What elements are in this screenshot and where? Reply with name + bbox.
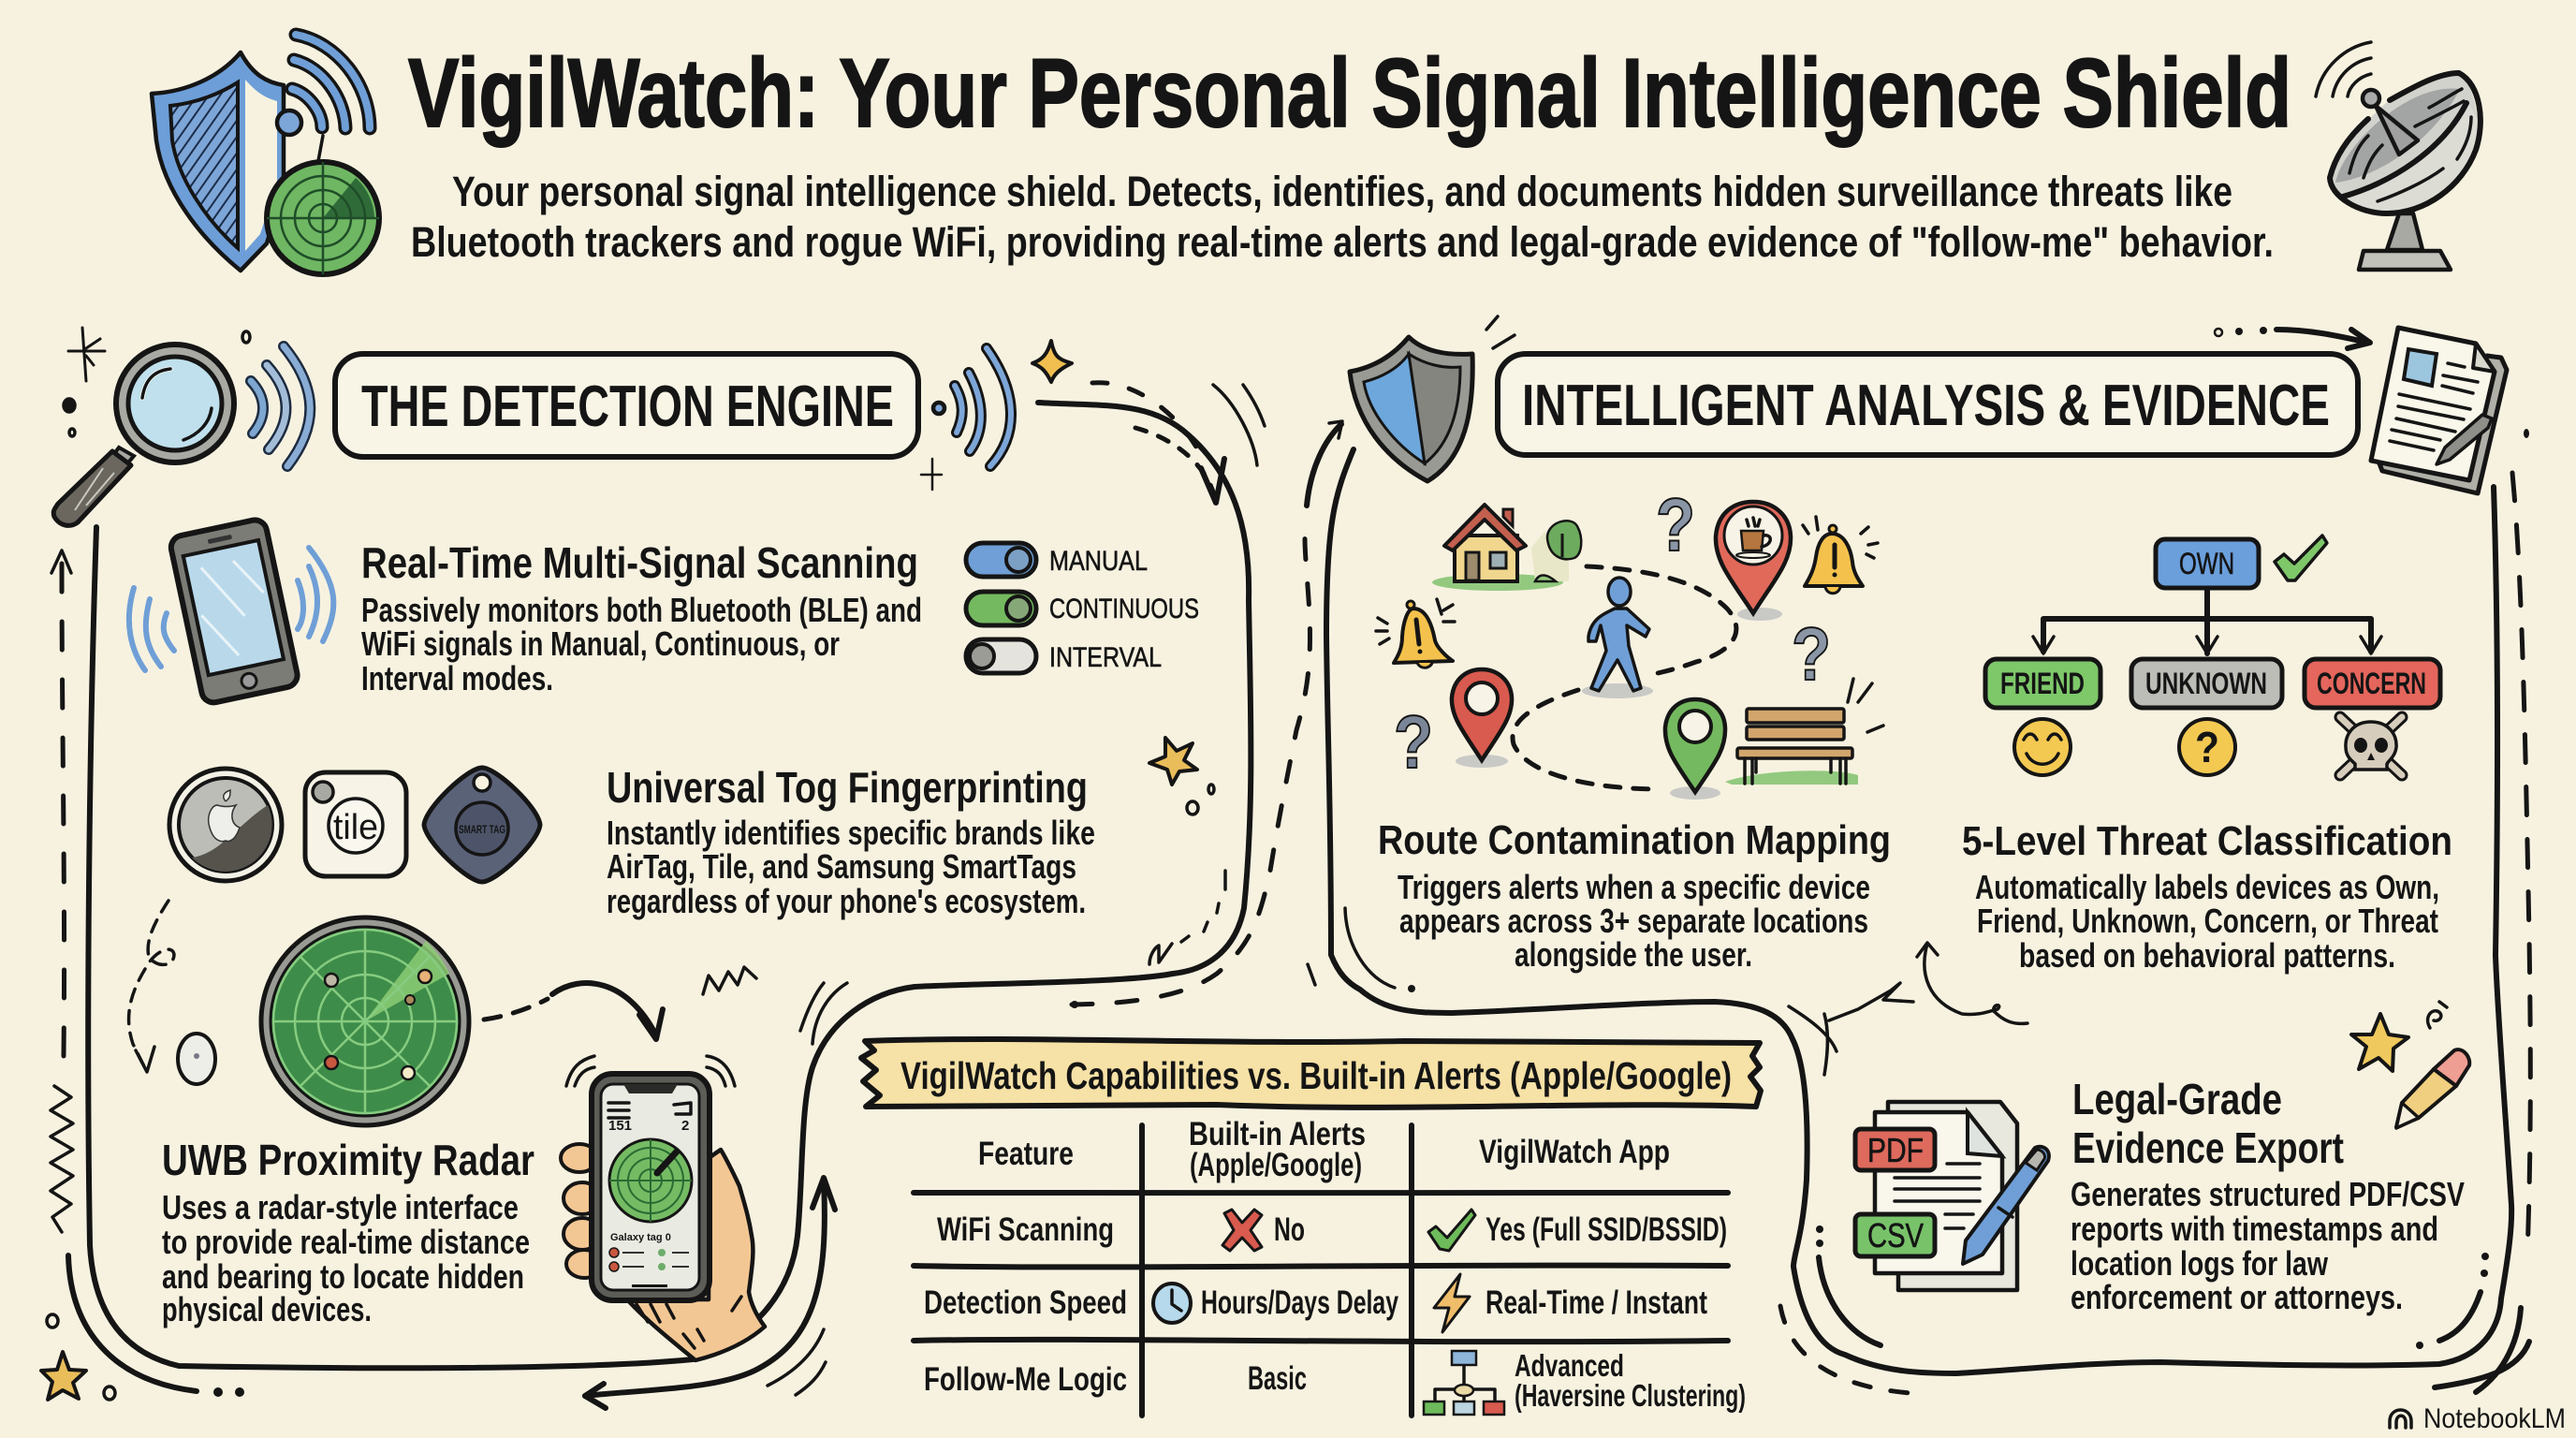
icon: check mark	[2275, 536, 2327, 580]
row: wifi scanning	[937, 1210, 1727, 1251]
table grid	[914, 1125, 1728, 1416]
route dashed path	[1513, 566, 1736, 789]
legend: scan mode toggles: CONTINUOUS	[1049, 594, 1199, 624]
decorative ticks	[1848, 679, 1883, 732]
badge: own: OWN	[2179, 547, 2234, 580]
icon: hand holding phone with radar: 151	[608, 1118, 632, 1134]
feature: real-time multi-signal scanning	[129, 518, 922, 705]
heading	[2072, 1075, 2344, 1172]
body text	[2071, 1175, 2465, 1316]
body text	[361, 591, 922, 697]
icon: pencil	[2396, 1049, 2469, 1128]
badge: concern	[2305, 659, 2440, 708]
section heading: intelligent analysis & evidence	[1498, 354, 2358, 455]
icon: hand holding phone with radar	[561, 1056, 765, 1360]
body text: location logs for law	[2071, 1244, 2329, 1283]
icon: question marks: ?	[1394, 700, 1433, 784]
body text	[1398, 868, 1870, 974]
icon: gold star bottom left	[41, 1352, 86, 1400]
feature: legal-grade evidence export	[1855, 1002, 2469, 1316]
body text	[162, 1188, 530, 1328]
icon: documents with pdf and csv tags and pen	[1855, 1102, 2049, 1290]
arrow: dotted arrow to document	[2215, 327, 2370, 348]
icon: tile tag	[305, 772, 406, 876]
panel: analysis and evidence frame	[1326, 449, 2511, 1373]
icon: question marks: ?	[1792, 612, 1831, 696]
icon: coffee location pin	[1716, 502, 1791, 621]
heading: Evidence Export	[2072, 1123, 2344, 1172]
icon: smile face	[2014, 719, 2071, 775]
row: wifi scanning: WiFi Scanning	[937, 1211, 1114, 1248]
body text: enforcement or attorneys.	[2071, 1278, 2403, 1316]
table column headers	[978, 1116, 1670, 1183]
body text: to provide real-time distance	[162, 1223, 530, 1261]
body text: reports with timestamps and	[2071, 1210, 2438, 1248]
body text: alongside the user.	[1515, 935, 1752, 974]
decorative dashes outside right frame	[2416, 429, 2530, 1392]
section heading: intelligent analysis & evidence: INTELLIGENT ANALYSIS & EVIDENCE	[1522, 374, 2330, 438]
icon: signal waves right of heading	[933, 348, 1011, 466]
table: capabilities comparison	[861, 1039, 1761, 1416]
icon: samsung tag: SMART TAG	[459, 823, 505, 836]
icon: airtag	[169, 769, 282, 881]
icon: magnifying glass	[53, 345, 310, 525]
icon: question marks	[1394, 483, 1831, 784]
row: follow-me logic	[924, 1348, 1746, 1415]
decorative squiggle and dots bottom left	[47, 1086, 244, 1400]
feature: universal tag fingerprinting	[169, 763, 1095, 920]
arrow: double ended outer arrow	[585, 983, 847, 1408]
arrow: curl dashed arrow to tracker	[129, 901, 215, 1084]
body text: appears across 3+ separate locations	[1399, 902, 1868, 940]
row: wifi scanning: No	[1274, 1211, 1305, 1248]
icon: tile tag: tile	[333, 808, 378, 847]
row: detection speed	[924, 1274, 1707, 1332]
heading: 5-Level Threat Classification	[1962, 818, 2452, 864]
icon: documents with pdf and csv tags and pen: PDF	[1867, 1131, 1924, 1169]
icon: question face: ?	[2195, 723, 2219, 771]
section heading: the detection engine	[335, 354, 918, 457]
illustration: house and tree	[1432, 505, 1581, 591]
legend: scan mode toggles	[966, 543, 1199, 673]
icon: skull and crossbones	[2340, 717, 2402, 775]
row: follow-me logic: Basic	[1248, 1360, 1307, 1397]
icon: gold sparkle	[1032, 341, 1072, 382]
subtitle text: Your personal signal intelligence shield. Detects, identifies, and documents hidden surveillance threats like	[452, 168, 2232, 215]
icon: hand holding phone with radar: 2	[681, 1118, 689, 1134]
heading: Route Contamination Mapping	[1378, 817, 1891, 863]
body text	[607, 814, 1095, 920]
arrow: frame upper-left arrow	[1307, 421, 1342, 506]
row: detection speed: Hours/Days Delay	[1201, 1284, 1398, 1321]
row: follow-me logic: (Haversine Clustering)	[1515, 1378, 1746, 1413]
table heading banner	[861, 1039, 1761, 1108]
decorative dashes along frame corner	[1072, 538, 1310, 1005]
badge: unknown: UNKNOWN	[2145, 667, 2267, 700]
diagram: classification tree	[1985, 536, 2440, 775]
heading: UWB Proximity Radar	[162, 1136, 534, 1184]
body text: physical devices.	[162, 1290, 372, 1328]
heading: Legal-Grade	[2072, 1075, 2282, 1123]
body text: Instantly identifies specific brands like	[607, 814, 1095, 852]
body text: Uses a radar-style interface	[162, 1188, 519, 1226]
icon: satellite dish	[2316, 42, 2481, 270]
row: detection speed: Detection Speed	[924, 1284, 1127, 1321]
subtitle text: Bluetooth trackers and rogue WiFi, providing real-time alerts and legal-grade evidence of "follow-me" behavior.	[411, 218, 2274, 266]
icon: smartphone with waves	[129, 518, 333, 705]
icon: gold star near frame	[1149, 738, 1214, 814]
section heading: the detection engine: THE DETECTION ENGINE	[361, 374, 894, 439]
body text: WiFi signals in Manual, Continuous, or	[361, 624, 840, 663]
icon: gold star	[2351, 1014, 2408, 1071]
badge: unknown	[2131, 659, 2282, 708]
body text: Triggers alerts when a specific device	[1398, 868, 1870, 906]
heading: Universal Tog Fingerprinting	[607, 763, 1088, 812]
table column headers: VigilWatch App	[1479, 1134, 1670, 1170]
icon: shield logo with wifi and radar	[152, 35, 379, 274]
badge: friend: FRIEND	[2000, 667, 2085, 700]
icon: red location pin	[1452, 669, 1512, 768]
legend: scan mode toggles: INTERVAL	[1049, 642, 1162, 673]
icon: alert bell left	[1376, 599, 1455, 668]
icon: green location pin	[1665, 699, 1725, 800]
table heading banner: VigilWatch Capabilities vs. Built-in Alerts (Apple/Google)	[900, 1054, 1732, 1097]
body text: AirTag, Tile, and Samsung SmartTags	[607, 847, 1076, 886]
icon: question face	[2179, 719, 2235, 775]
decorative lines lower-left of evidence frame	[1071, 908, 2027, 1393]
body text: Friend, Unknown, Concern, or Threat	[1977, 902, 2438, 940]
icon: split shield	[1350, 337, 1472, 481]
icon: samsung tag	[424, 768, 540, 882]
legend: scan mode toggles: MANUAL	[1049, 546, 1148, 577]
icon: documents with pdf and csv tags and pen: CSV	[1867, 1216, 1924, 1255]
icon: question marks: ?	[1656, 483, 1695, 566]
body text: Generates structured PDF/CSV	[2071, 1175, 2465, 1213]
icon: park bench	[1725, 709, 1858, 785]
badge: friend	[1985, 659, 2100, 708]
body text: regardless of your phone's ecosystem.	[607, 882, 1086, 920]
icon: large radar	[261, 917, 469, 1125]
table column headers: (Apple/Google)	[1190, 1147, 1362, 1183]
icon: clustering tree	[1424, 1351, 1504, 1415]
decorative ticks above shield	[1486, 316, 1515, 348]
body text: based on behavioral patterns.	[2019, 936, 2395, 975]
icon: alert bell right	[1803, 517, 1878, 594]
icon: walking person	[1582, 578, 1653, 698]
row: detection speed: Real-Time / Instant	[1486, 1284, 1707, 1321]
table column headers: Built-in Alerts	[1189, 1116, 1366, 1152]
body text: Passively monitors both Bluetooth (BLE) and	[361, 591, 922, 629]
arrow: radar to phone dashed arrow	[484, 967, 756, 1039]
table column headers: Feature	[978, 1136, 1074, 1172]
feature: uwb proximity radar	[162, 917, 765, 1360]
row: wifi scanning: Yes (Full SSID/BSSID)	[1486, 1211, 1727, 1248]
badge: concern: CONCERN	[2317, 667, 2426, 700]
body text	[1975, 868, 2439, 975]
row: follow-me logic: Follow-Me Logic	[924, 1361, 1127, 1398]
feature: route contamination mapping	[1376, 483, 1891, 974]
body text: Automatically labels devices as Own,	[1975, 868, 2439, 906]
icon: hand holding phone with radar: Galaxy tag 0	[610, 1232, 671, 1243]
arrow: frame connector with dashed arrow	[1092, 383, 1265, 503]
heading: Real-Time Multi-Signal Scanning	[361, 538, 918, 587]
icon: document with pencil	[2371, 328, 2507, 493]
arrow: left dashed up arrow	[51, 550, 71, 1056]
body text: and bearing to locate hidden	[162, 1257, 524, 1296]
badge: own	[2156, 539, 2259, 588]
subtitle text	[411, 168, 2274, 266]
body text: Interval modes.	[361, 659, 553, 697]
decorative sparks near left heading	[64, 328, 942, 490]
row: follow-me logic: Advanced	[1515, 1348, 1624, 1383]
panel: detection engine frame	[88, 403, 1251, 1368]
decorative doodle	[2428, 1002, 2447, 1028]
feature: 5-level threat classification	[1962, 536, 2452, 975]
